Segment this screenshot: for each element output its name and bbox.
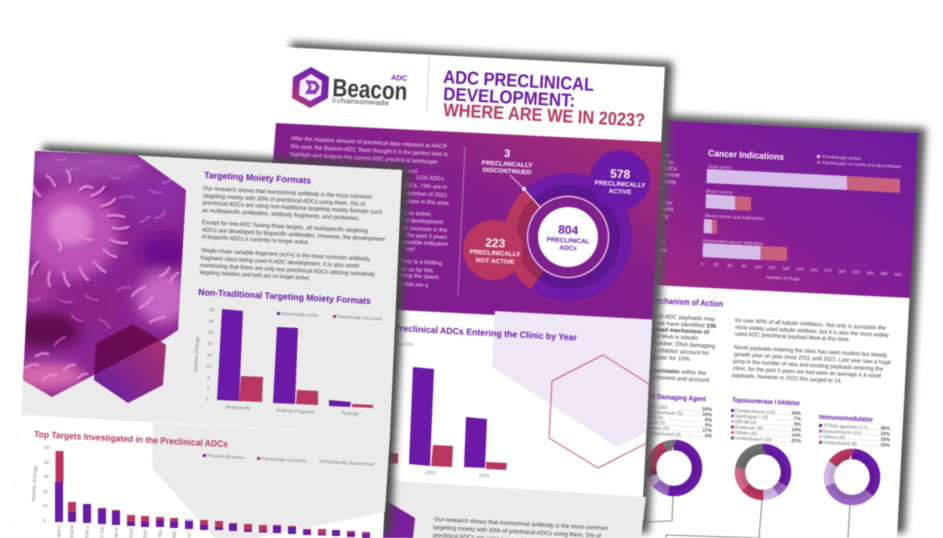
- text: right page intro fragments: ing: [660, 214, 668, 220]
- text: intro paragraph: highlight and analyze the current ADC preclinical landscape.: [290, 152, 439, 166]
- callout: preclinically active: 578: [610, 166, 631, 182]
- panel: DNA damaging agent: IGN (3): [647, 415, 664, 421]
- axis labels: [701, 262, 902, 281]
- panel: DNA damaging agent: 54%: [702, 406, 713, 413]
- text: intro paragraph: this year, the Beacon ADC Team thought it is the perfect time to: [290, 144, 448, 158]
- axis labels: 4: [207, 386, 210, 391]
- text: banner paragraphs, partly covered: proportion of 2022: [401, 191, 447, 199]
- text: right page intro fragments: [657, 153, 680, 265]
- panel: immunomodulator: 15%: [880, 437, 891, 443]
- panel: topoisomerase I inhibitor: 22%: [791, 438, 802, 445]
- icon: hexagon logo mark: [292, 67, 329, 108]
- axis labels: 30: [714, 262, 719, 267]
- callout: total preclinical ADCs: ADCs: [559, 245, 577, 252]
- axis labels: 24: [208, 330, 213, 335]
- text: mechanism column one fragments: ly we have identified 330: [651, 321, 717, 330]
- panel: topoisomerase I inhibitor: 7%: [794, 416, 802, 423]
- heading: top targets: Top Targets Investigated in the Preclinical ADCs: [34, 429, 228, 449]
- panel: immunomodulator: Undisclosed (5): [823, 440, 858, 448]
- heading: entering the clinic: Preclinical ADCs Entering the Clinic by Year: [394, 323, 578, 343]
- axis labels: Antibody Fragment: [276, 407, 315, 415]
- panel: DNA damaging agent: 10%: [702, 412, 713, 418]
- text: right page intro fragments: Cs: [658, 240, 665, 246]
- text: banner paragraphs, partly covered: nic so far this: [399, 267, 433, 275]
- panel: immunomodulator: Duocarmycin (11): [823, 429, 862, 437]
- text: lower paragraph: Our research shows that monoclonal antibody is the most common: [434, 517, 608, 532]
- text: right page intro fragments: cancer: [663, 172, 680, 179]
- callout: preclinically active: ACTIVE: [609, 188, 632, 196]
- callout: discontinued: DISCONTINUED: [482, 167, 532, 176]
- panel: DNA damaging agent: 6%: [705, 423, 713, 429]
- callout: preclinically not active: PRECLINICALLY: [469, 249, 522, 258]
- text: mechanism column one fragments: ayload mechanism of: [649, 327, 709, 336]
- title: [443, 66, 646, 131]
- legend: top targets: Preclinically active: [207, 453, 245, 460]
- legend: cancer indications: Preclinically not active and discontinued: [822, 160, 902, 169]
- image: hexagon microscopy crop: [383, 500, 415, 538]
- callout: total preclinical ADCs: [546, 222, 590, 252]
- title: DEVELOPMENT:: [443, 83, 576, 111]
- text: right page intro fragments: es to: [661, 159, 673, 166]
- axis labels: 8: [207, 375, 210, 380]
- text: targeting moiety paragraphs: ADCs are developed by bispecific antibodies. However, the development: [202, 228, 385, 243]
- text: targeting moiety paragraphs: [199, 186, 385, 282]
- text: targeting moiety paragraphs: targeting moieties and both are no longer active.: [199, 270, 311, 282]
- axis labels: Probody: [341, 411, 359, 416]
- text: mechanism column one fragments: f auristatin within the: [649, 368, 707, 377]
- callout: preclinically not active: [463, 220, 523, 280]
- callout: preclinically active: [590, 150, 650, 210]
- legend: non-traditional formats: Preclinically active: [281, 311, 319, 318]
- panel: DNA damaging agent: Others (9): [647, 425, 670, 432]
- panel: entering the clinic by year: the clinic: [396, 341, 415, 347]
- bar chart: cancer indications: Blood cancer: [706, 189, 733, 195]
- text: banner paragraphs, partly covered: ed as active,: [400, 210, 433, 218]
- text: banner paragraphs, partly covered: ed development: [402, 218, 444, 226]
- text: banner paragraphs, partly covered: uge increase in the: [399, 225, 447, 234]
- text: banner paragraphs, partly covered: me!: [405, 247, 416, 253]
- text: targeting moiety paragraphs: Except for one ADC having three targets, all multispecific targeting: [202, 220, 368, 235]
- text: mechanism column two: payloads, however in 2022 this surged to 14.: [732, 373, 842, 385]
- bar chart: cancer indications: [701, 164, 902, 281]
- axis labels: 28: [208, 318, 214, 324]
- text: banner paragraphs, partly covered: clinic is a thrilling: [399, 259, 442, 267]
- bar chart: top targets: [31, 445, 370, 538]
- axis labels: 90: [742, 264, 747, 268]
- page: center, title and preclinical overview: [258, 42, 673, 538]
- spine shadows: [33, 172, 129, 346]
- text: mechanism column two: most widely used tubulin inhibitor, but it is also the most widely: [735, 325, 889, 339]
- panel: DNA damaging agent: PBD (30): [647, 404, 668, 411]
- text: right page intro fragments: rtainly: [661, 179, 676, 186]
- text: mechanism column one fragments: [648, 314, 717, 384]
- axis: target names: EGFR: [69, 524, 75, 538]
- text: banner paragraphs, partly covered: ering the space,: [399, 273, 441, 281]
- text: right page intro fragments: in: [657, 259, 662, 265]
- panel: topoisomerase I inhibitor: 9%: [794, 422, 802, 428]
- text: mechanism column two: for over 60% of all tubulin inhibitors. Not only is auristatin the: [735, 318, 887, 332]
- text: right page intro fragments: e.: [659, 186, 665, 192]
- axis labels: 270: [824, 268, 832, 273]
- text: mechanism column two: growth year on year since 2011 until 2022. Last year saw a huge: [734, 352, 892, 366]
- panel: entering the clinic by year: [388, 311, 660, 478]
- text: mechanism column two: jump in the number of new and exciting payloads entering the: [732, 359, 884, 373]
- text: mechanism column one fragments: ad MoA is tubulin: [653, 334, 698, 342]
- axis labels: 210: [796, 266, 804, 272]
- panel: DNA damaging agent: Duocarmycin (5): [647, 409, 683, 417]
- image: purple cell microscopy hexagon: [22, 150, 187, 398]
- text: right page intro fragments: ber: [662, 153, 670, 159]
- page: left, targeting moiety formats: [9, 140, 410, 538]
- axis labels: 0: [701, 262, 704, 266]
- callout: preclinically active: PRECLINICALLY: [594, 180, 647, 189]
- bar chart: cancer indications: Unspecified cancer indication: [703, 238, 764, 246]
- title: WHERE ARE WE IN 2023?: [443, 99, 646, 131]
- legend: non-traditional formats: [277, 311, 383, 321]
- panel: DNA damaging agent: DNA Damaging Agent: [642, 393, 707, 403]
- panel: topoisomerase I inhibitor: Others (6): [735, 430, 758, 437]
- text: right page intro fragments: ADCs: [662, 166, 677, 173]
- axis labels: 12: [206, 364, 212, 368]
- text: mechanism column one fragments: s number, DNA damaging: [648, 340, 715, 350]
- text: banner paragraphs, partly covered: r the past 3 years: [403, 233, 447, 241]
- bar chart: entering the clinic by year: 2023: [479, 473, 490, 478]
- callout: discontinued: [481, 148, 534, 191]
- text: lower paragraph: [433, 517, 613, 538]
- bar chart: cancer indications: Blood cancer and solid tumor: [705, 213, 765, 221]
- panel: targeting moiety gray section: [21, 150, 402, 435]
- panel: DNA damaging agent: [642, 393, 713, 522]
- donut: DNA damaging agent: [651, 445, 697, 491]
- bar chart: top targets: Number of Drugs: [31, 465, 38, 501]
- axis labels: 60: [728, 263, 733, 268]
- callout: preclinically not active: 223: [485, 235, 506, 251]
- bar chart: top targets: 10: [42, 503, 48, 508]
- axis labels: 180: [782, 266, 790, 271]
- callout: total preclinical ADCs: 804: [558, 222, 579, 238]
- bar chart: cancer indications: Solid tumor: [708, 164, 732, 170]
- legend: non-traditional formats: Preclinically not active: [337, 314, 383, 321]
- text: targeting moiety paragraphs: mentioning that there are only two preclinical ADCs utilizing nanobody: [200, 263, 375, 278]
- text: targeting moiety paragraphs: Our research shows that monoclonal antibody is the most common: [203, 186, 372, 201]
- bar chart: top targets: 50: [44, 445, 50, 450]
- bar chart: entering the clinic by year: [388, 367, 507, 478]
- icon: overlay hexagon: [94, 324, 166, 403]
- text: mechanism column two: used ADC preclinical payload MoA at this time.: [735, 332, 850, 344]
- panel: immunomodulator: STING agonists (17): [823, 423, 868, 431]
- panel: immunomodulator: 15%: [880, 442, 891, 449]
- panel: preclinical overview banner: [262, 123, 662, 323]
- text: right page intro fragments: has: [658, 248, 667, 254]
- callout: total preclinical ADCs: PRECLINICAL: [546, 236, 590, 246]
- axis labels: Number of Drugs: [766, 275, 801, 281]
- bar chart: top targets: 0: [43, 518, 46, 523]
- bar chart: non-traditional formats: [193, 307, 383, 416]
- axis labels: 32: [209, 307, 215, 312]
- text: banner paragraphs, partly covered: 1105 ADCs: [416, 175, 444, 183]
- callout: discontinued: 3: [504, 148, 511, 160]
- axis labels: Multispecific: [225, 404, 251, 411]
- text: mechanism column one fragments: nical ADC payloads may: [651, 314, 715, 323]
- panel: topoisomerase I inhibitor: DN-38 (4): [735, 419, 757, 426]
- axis labels: 300: [838, 269, 846, 274]
- logo: Beacon ADC by Hanson Wade: ADC: [391, 73, 408, 83]
- axis labels: 330: [852, 270, 860, 274]
- bar chart: top targets: 20: [43, 489, 48, 494]
- panel: topoisomerase I inhibitor: Topoisomerase I Inhibitor: [732, 397, 800, 408]
- legend: top targets: Preclinically discontinued: [323, 459, 375, 467]
- panel: topoisomerase I inhibitor: Gly/Dxtptn I (3): [735, 414, 768, 421]
- text: targeting moiety paragraphs: fragment class being used in ADC development. It is also worth: [200, 256, 359, 270]
- logo: Beacon ADC by Hanson Wade: Beacon: [332, 74, 408, 106]
- axis labels: 150: [768, 265, 776, 270]
- panel: DNA damaging agent: 6%: [705, 433, 713, 440]
- panel: topoisomerase I inhibitor: 34%: [791, 410, 802, 417]
- bar chart: entering the clinic by year: 2022: [425, 470, 436, 475]
- text: right page intro fragments: ased: [661, 206, 673, 213]
- callout: discontinued: PRECLINICALLY: [481, 160, 534, 169]
- axis labels: 390: [880, 271, 888, 276]
- text: intro paragraph: [290, 136, 448, 166]
- panel: cancer indications: [632, 119, 918, 298]
- text: targeting moiety paragraphs: as multispecific antibodies, antibody fragments, and probodies.: [202, 208, 360, 222]
- text: targeting moiety paragraphs: targeting moiety with 33% of preclinical ADCs using them. 5% of: [203, 194, 365, 208]
- panel: immunomodulator: Others (5): [823, 434, 846, 441]
- text: banner paragraphs, partly covered: possible indication: [401, 240, 448, 248]
- panel: immunomodulator: 33%: [880, 431, 891, 438]
- axis labels: 120: [754, 264, 762, 270]
- spines: [32, 171, 128, 286]
- logo: Beacon ADC by Hanson Wade: byhansonwade: [332, 96, 389, 107]
- legend: cancer indications: Preclinically active: [822, 154, 862, 161]
- text: banner paragraphs, partly covered: ical and: [397, 168, 417, 175]
- text: banner paragraphs, partly covered: crease in this area.: [402, 198, 451, 207]
- axis labels: 360: [866, 270, 874, 276]
- panel: immunomodulator: [819, 414, 891, 538]
- panel: immunomodulator: 38%: [880, 425, 891, 432]
- donut: topoisomerase I inhibitor: [740, 449, 786, 495]
- panel: topoisomerase I inhibitor: 14%: [791, 432, 802, 439]
- panel: topoisomerase I inhibitor: Undisclosed (10): [735, 436, 772, 443]
- page: right, cancer indications and mechanism of action: [620, 114, 926, 538]
- panel: DNA damaging agent: 6%: [705, 417, 713, 424]
- panel: DNA damaging agent: DGD (3): [647, 420, 666, 427]
- logo: Beacon ADC by Hanson Wade: [292, 67, 408, 108]
- bar chart: top targets: 30: [43, 474, 49, 479]
- bar chart: top targets: 40: [44, 460, 49, 465]
- text: banner paragraphs, partly covered: [397, 168, 451, 289]
- axis: target names: [56, 524, 192, 538]
- legend: cancer indications: [817, 154, 902, 169]
- legend: top targets: Preclinically not active: [261, 456, 307, 463]
- panel: DNA damaging agent: 17%: [702, 428, 713, 434]
- axis labels: 240: [810, 268, 818, 272]
- title: ADC PRECLINICAL: [443, 66, 595, 95]
- axis labels: 0: [206, 397, 209, 402]
- text: banner paragraphs, partly covered: rs that are a: [398, 281, 429, 289]
- axis labels: 20: [207, 341, 213, 346]
- axis labels: 16: [207, 352, 212, 358]
- axis labels: 420: [894, 272, 902, 277]
- text: mechanism column one fragments: e I inhibitor account for: [649, 348, 709, 357]
- callout: preclinically not active: NOT ACTIVE: [475, 257, 515, 266]
- text: mechanism column two: clinic, for the past 5 years we had seen an average 4.4 novel: [733, 366, 881, 380]
- panel: topoisomerase I inhibitor: Exatecan (6): [735, 425, 763, 432]
- panel: immunomodulator: Immunomodulator: [819, 414, 873, 424]
- panel: top targets: [31, 423, 390, 538]
- heading: cancer indications: Cancer Indications: [708, 148, 784, 162]
- text: targeting moiety paragraphs: Single-chain variable fragment (scFv) is the most common antibody: [201, 248, 370, 263]
- text: mechanism column one fragments: prominent and account: [649, 375, 710, 384]
- axis labels: [193, 307, 359, 416]
- text: targeting moiety paragraphs: of bispecific ADCs is currently no longer active.: [201, 235, 310, 246]
- panel: topoisomerase I inhibitor: 14%: [791, 427, 802, 434]
- text: mechanism column two: [732, 318, 892, 385]
- text: intro paragraph: After the massive amount of preclinical data released at AACR: [291, 136, 447, 150]
- text: mechanism column one fragments: mpatic for 10%.: [650, 355, 692, 363]
- heading: non-traditional targeting moiety formats: Non-Traditional Targeting Moiety Formats: [198, 287, 371, 306]
- legend: top targets: [203, 453, 375, 467]
- donut: preclinical ADC status: [463, 148, 650, 312]
- text: targeting moiety paragraphs: preclinical ADCs are using non-traditional targeting moiety formats such: [202, 201, 382, 216]
- panel: DNA damaging agent: Undisclosed (3): [647, 431, 682, 438]
- panel: topoisomerase I inhibitor: Camptothecin (15): [735, 408, 776, 416]
- text: banner paragraphs, partly covered: ADCs, 73% are in: [402, 183, 447, 191]
- axis labels: Number of Drugs: [193, 336, 200, 372]
- text: mechanism column two: Novel payloads entering the clinic has seen modest but steady: [734, 345, 887, 359]
- heading: mechanism of action: Mechanism of Action: [650, 295, 723, 309]
- heading: targeting moiety formats: Targeting Moiety Formats: [204, 170, 311, 186]
- panel: topoisomerase I inhibitor: [731, 397, 802, 538]
- panel: center lower text section: [378, 480, 646, 538]
- donut: immunomodulator: [829, 454, 875, 500]
- text: right page intro fragments: Cs for: [657, 200, 672, 207]
